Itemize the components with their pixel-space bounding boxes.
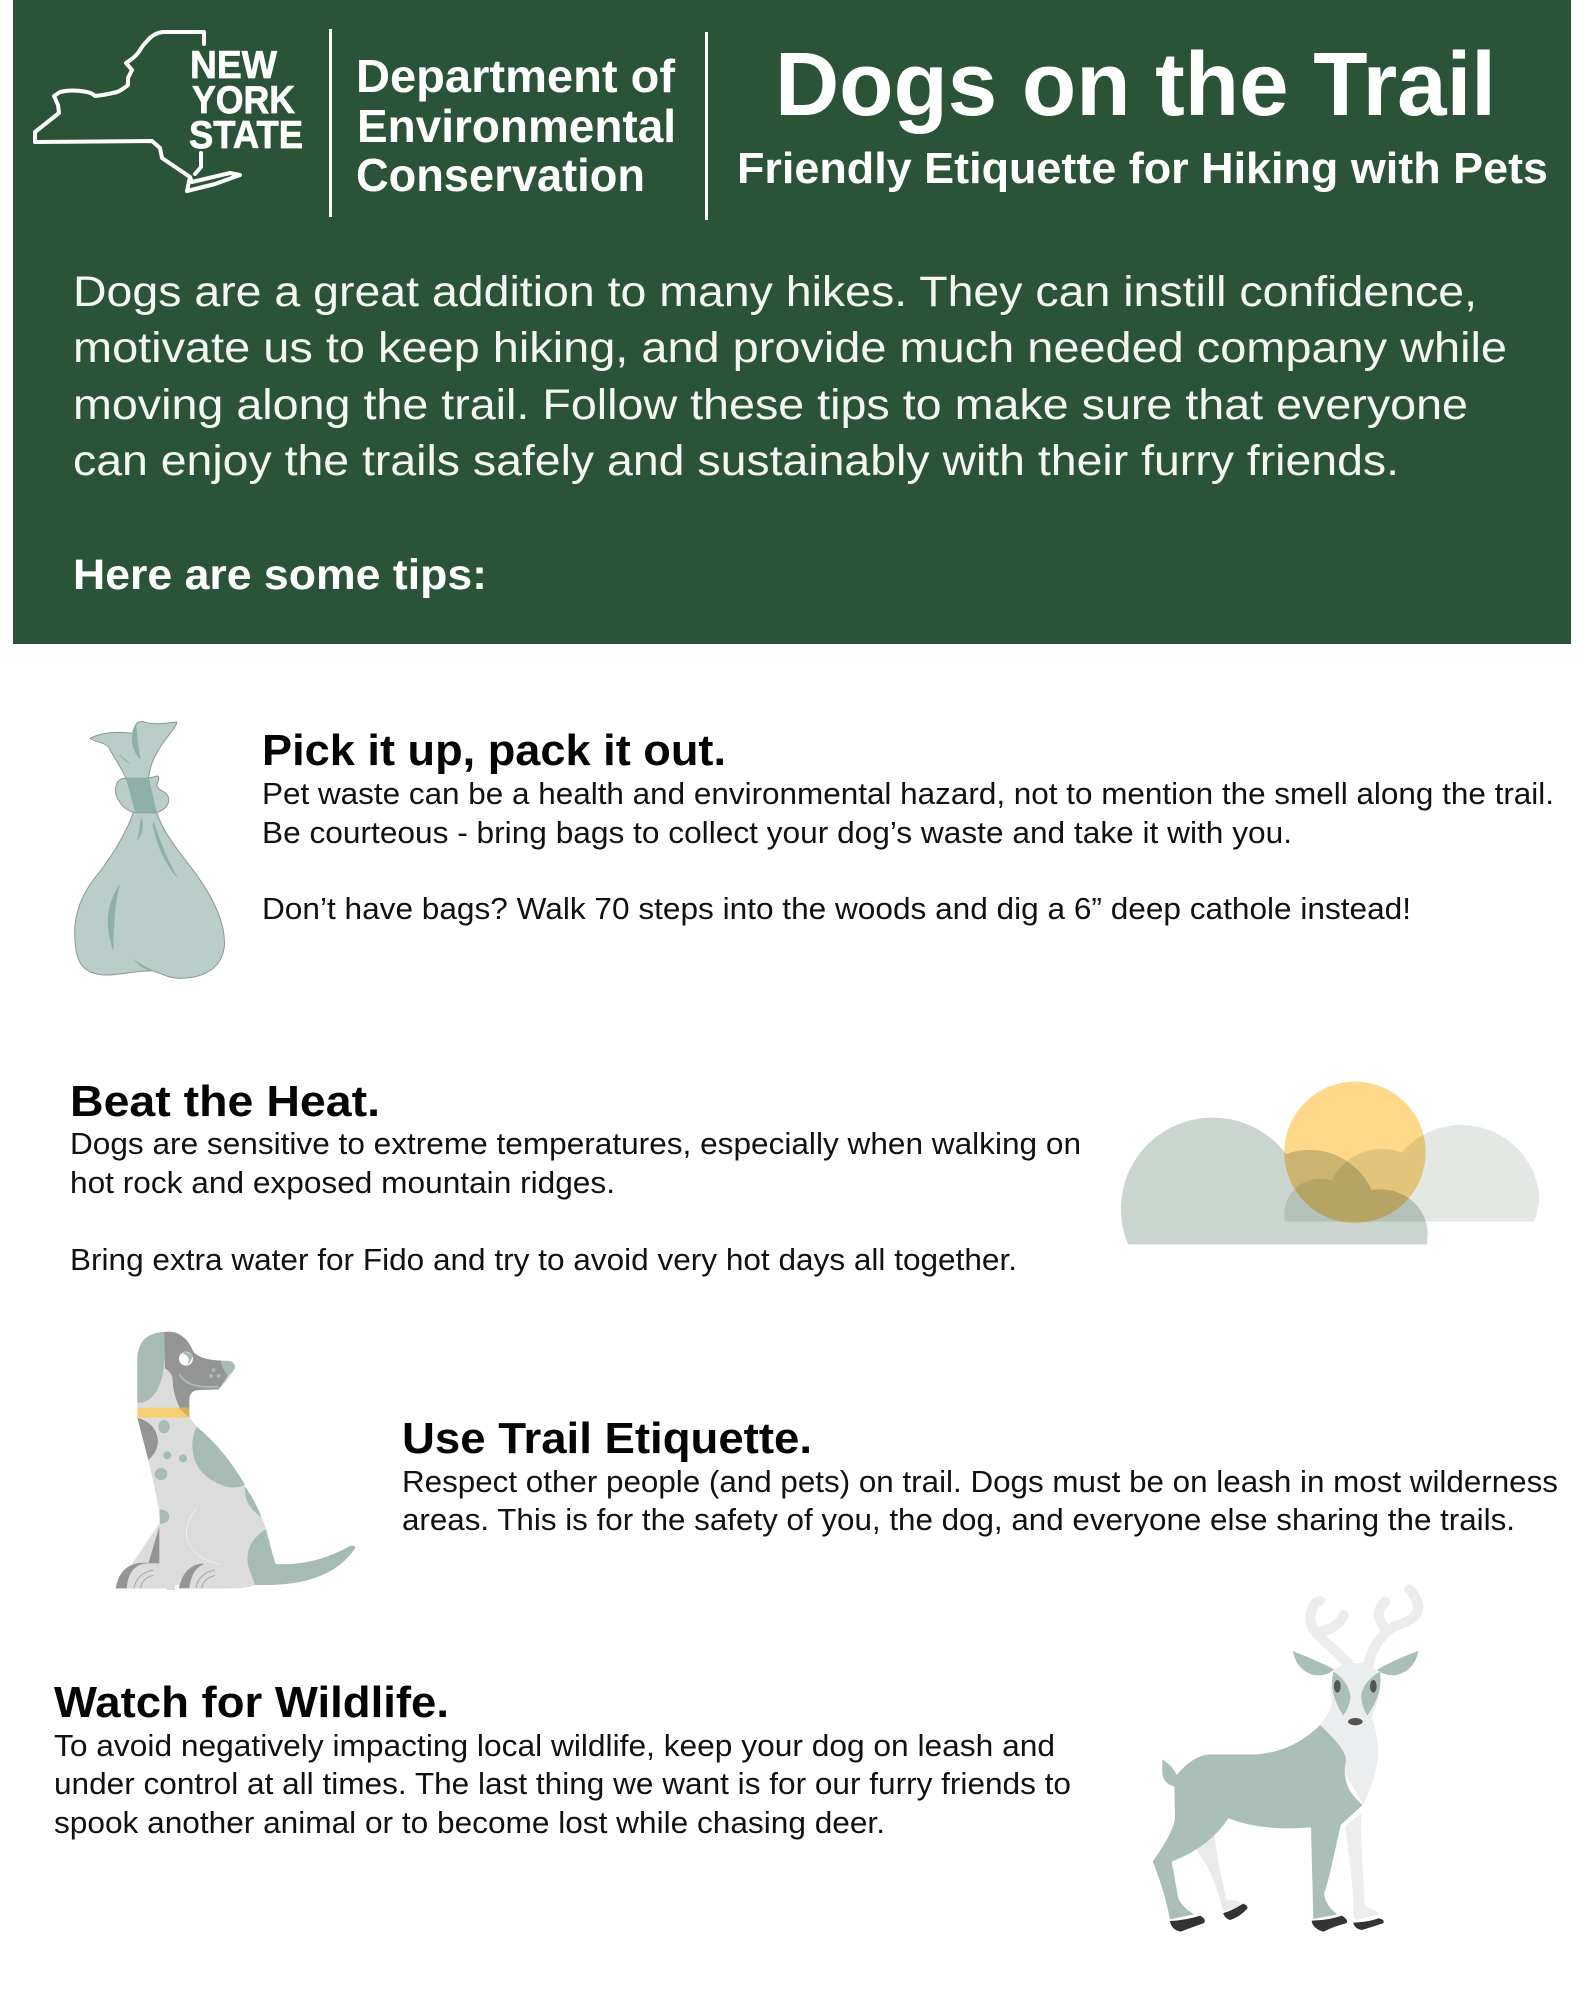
- heading: Pick it up, pack it out.: [262, 726, 726, 775]
- heading: Use Trail Etiquette.: [402, 1414, 812, 1463]
- department name: [356, 50, 676, 201]
- intro paragraph: can enjoy the trails safely and sustainably with their furry friends.: [73, 437, 1399, 485]
- logo wordmark: STATE: [189, 114, 303, 157]
- department name: Conservation: [356, 149, 645, 201]
- logo: New York State: [35, 32, 303, 191]
- panel: watch for wildlife tip: [54, 1589, 1418, 1931]
- heading: Watch for Wildlife.: [54, 1678, 449, 1727]
- panel: green header: [13, 0, 1571, 644]
- body text: Respect other people (and pets) on trail. Dogs must be on leash in most wilderness: [402, 1464, 1558, 1499]
- heading: Beat the Heat.: [70, 1077, 380, 1126]
- body text: Be courteous - bring bags to collect your dog’s waste and take it with you.: [262, 815, 1292, 850]
- logo wordmark: YORK: [192, 79, 295, 122]
- tips lead-in: Here are some tips:: [73, 551, 487, 599]
- body text: under control at all times. The last thing we want is for our furry friends to: [54, 1766, 1071, 1801]
- body text: [54, 1728, 1071, 1840]
- department name: Department of: [356, 50, 676, 102]
- body text: spook another animal or to become lost while chasing deer.: [54, 1805, 885, 1840]
- body text: Don’t have bags? Walk 70 steps into the woods and dig a 6” deep cathole instead!: [262, 891, 1411, 926]
- logo wordmark: NEW: [190, 44, 277, 87]
- panel: trail etiquette tip: [116, 1332, 1558, 1590]
- body text: To avoid negatively impacting local wildlife, keep your dog on leash and: [54, 1728, 1055, 1763]
- intro paragraph: Dogs are a great addition to many hikes. They can instill confidence,: [73, 268, 1477, 316]
- icon: deer: [1153, 1589, 1418, 1931]
- body text: [70, 1126, 1081, 1277]
- intro paragraph: [73, 268, 1507, 485]
- body text: areas. This is for the safety of you, the dog, and everyone else sharing the trails.: [402, 1502, 1515, 1537]
- body text: [402, 1464, 1558, 1537]
- panel: beat the heat tip: [70, 1077, 1539, 1277]
- body text: [262, 776, 1554, 926]
- icon: sun and clouds: [1121, 1082, 1539, 1244]
- icon: New York State outline: [35, 32, 240, 191]
- department name: Environmental: [357, 100, 676, 152]
- title: Dogs on the Trail: [775, 35, 1496, 135]
- icon: waste bag: [75, 721, 224, 978]
- icon: sitting dog: [116, 1332, 355, 1590]
- intro paragraph: motivate us to keep hiking, and provide much needed company while: [73, 324, 1507, 372]
- subtitle: Friendly Etiquette for Hiking with Pets: [737, 144, 1548, 193]
- logo wordmark: [189, 44, 303, 157]
- body text: Pet waste can be a health and environmental hazard, not to mention the smell along the trail.: [262, 776, 1554, 811]
- body text: Dogs are sensitive to extreme temperatures, especially when walking on: [70, 1126, 1081, 1161]
- intro paragraph: moving along the trail. Follow these tips to make sure that everyone: [73, 381, 1468, 429]
- body text: hot rock and exposed mountain ridges.: [70, 1165, 615, 1200]
- body text: Bring extra water for Fido and try to avoid very hot days all together.: [70, 1242, 1017, 1277]
- panel: pick it up tip: [75, 721, 1554, 978]
